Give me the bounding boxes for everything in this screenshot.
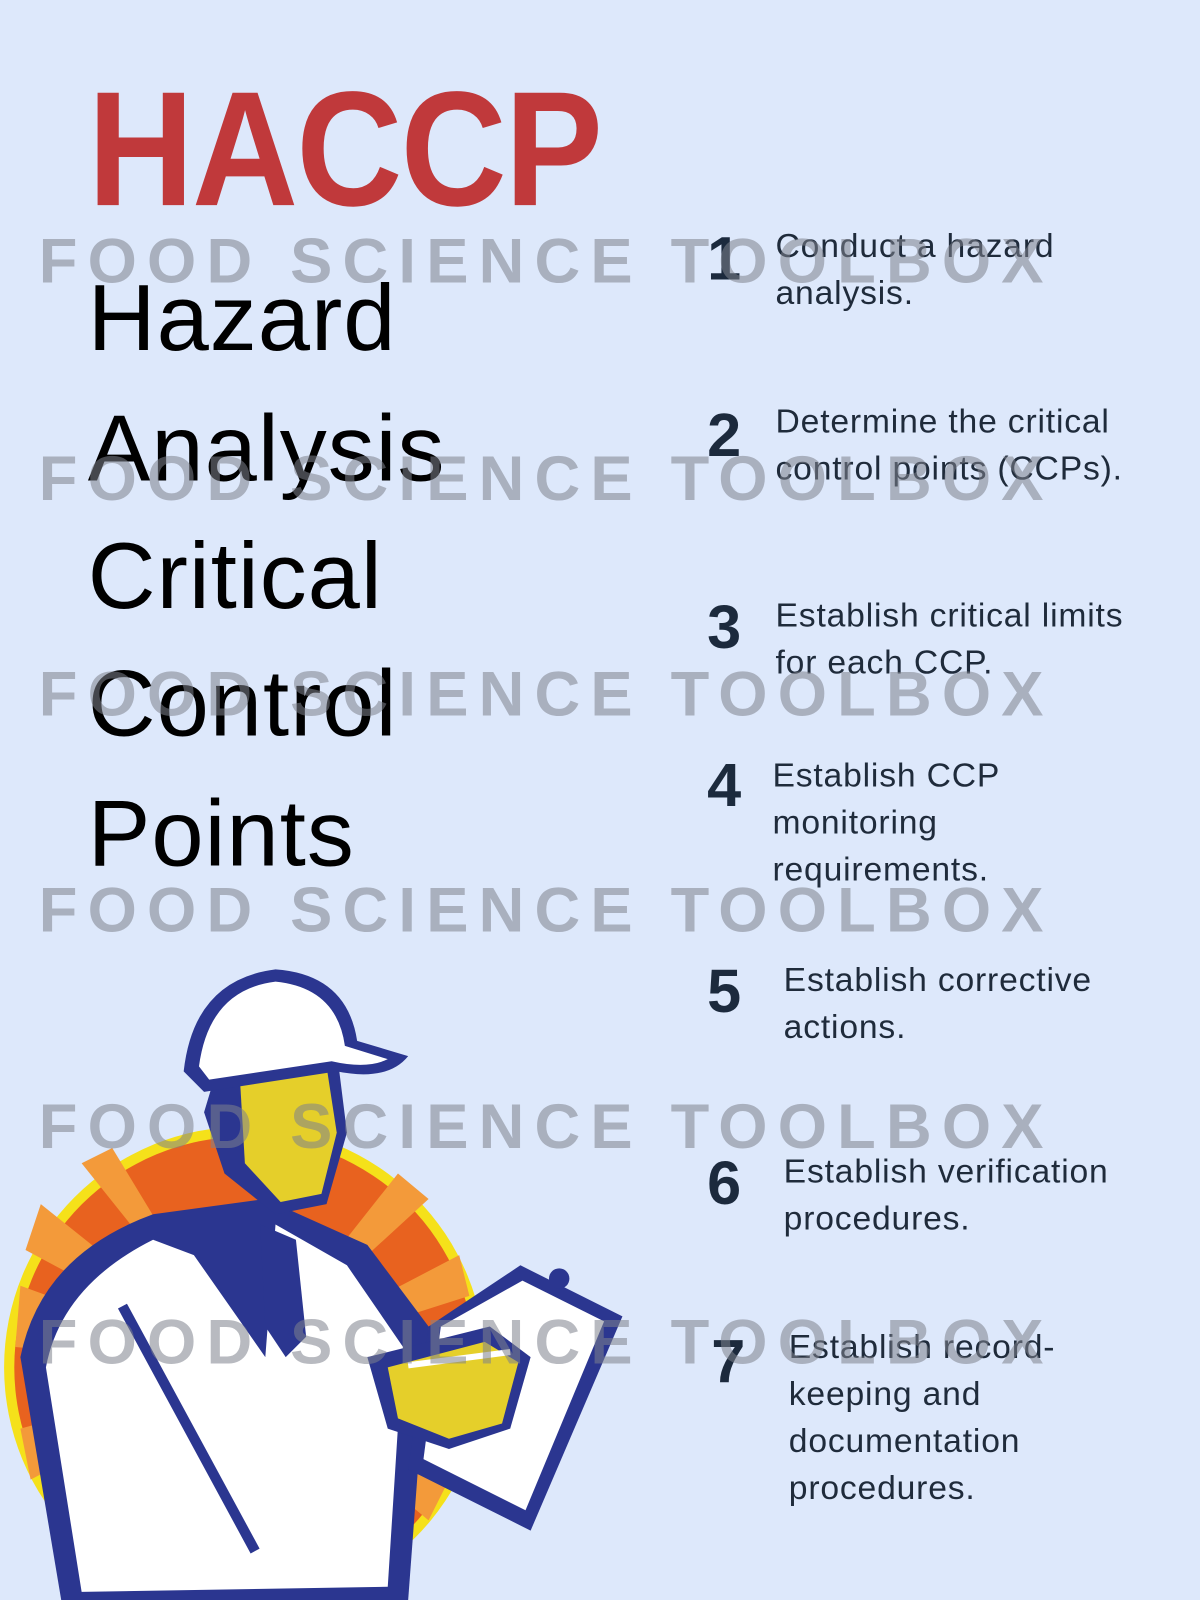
- step 7: 7: [711, 1328, 745, 1396]
- step 3: for each CCP.: [776, 643, 993, 681]
- step 3: 3: [707, 593, 741, 661]
- step 4: monitoring: [772, 803, 938, 841]
- step 2: [707, 401, 1123, 487]
- subtitle: Control: Control: [88, 652, 398, 756]
- step 5: Establish corrective: [784, 960, 1092, 998]
- title: HACCP: [88, 57, 601, 240]
- step 4: Establish CCP: [772, 756, 1000, 794]
- watermark rows: FOOD SCIENCE TOOLBOX: [39, 227, 1054, 297]
- step 4: [707, 751, 1000, 888]
- watermark rows: FOOD SCIENCE TOOLBOX: [39, 659, 1054, 730]
- subtitle: Points: Points: [88, 782, 355, 886]
- step 2: control points (CCPs).: [776, 449, 1123, 487]
- step 1: analysis.: [776, 273, 914, 311]
- step 6: [707, 1149, 1109, 1237]
- step 4: 4: [707, 751, 741, 819]
- step 1: Conduct a hazard: [776, 227, 1054, 264]
- step 7: procedures.: [789, 1468, 976, 1506]
- subtitle: Hazard: Hazard: [88, 266, 397, 370]
- step 5: [707, 957, 1092, 1045]
- step 6: Establish verification: [784, 1152, 1109, 1190]
- body / coat: [20, 1199, 429, 1600]
- step 2: Determine the critical: [776, 402, 1110, 440]
- watermark rows: FOOD SCIENCE TOOLBOX: [39, 444, 1054, 514]
- illustration: inspector with clipboard: [4, 969, 622, 1600]
- step 7: documentation: [789, 1421, 1020, 1459]
- step 2: 2: [707, 401, 741, 469]
- watermark rows: FOOD SCIENCE TOOLBOX: [39, 1092, 1054, 1162]
- subtitle: Analysis: Analysis: [88, 397, 445, 501]
- step 6: 6: [707, 1149, 741, 1217]
- head: [184, 969, 408, 1214]
- sunburst circle: [4, 1127, 486, 1600]
- step 5: actions.: [784, 1007, 906, 1045]
- step 3: Establish critical limits: [776, 596, 1123, 634]
- step 7: Establish record-: [789, 1328, 1055, 1365]
- step 7: keeping and: [789, 1374, 981, 1412]
- step 6: procedures.: [784, 1199, 970, 1237]
- step 5: 5: [707, 957, 741, 1026]
- step 1: 1: [707, 224, 741, 293]
- step 1: [707, 224, 1054, 311]
- step 3: [707, 593, 1123, 681]
- watermark rows: FOOD SCIENCE TOOLBOX: [39, 1307, 1054, 1378]
- step 4: requirements.: [772, 850, 989, 888]
- clipboard and hand: [367, 1265, 622, 1531]
- watermark rows: FOOD SCIENCE TOOLBOX: [39, 876, 1054, 946]
- subtitle: Critical: Critical: [88, 524, 383, 629]
